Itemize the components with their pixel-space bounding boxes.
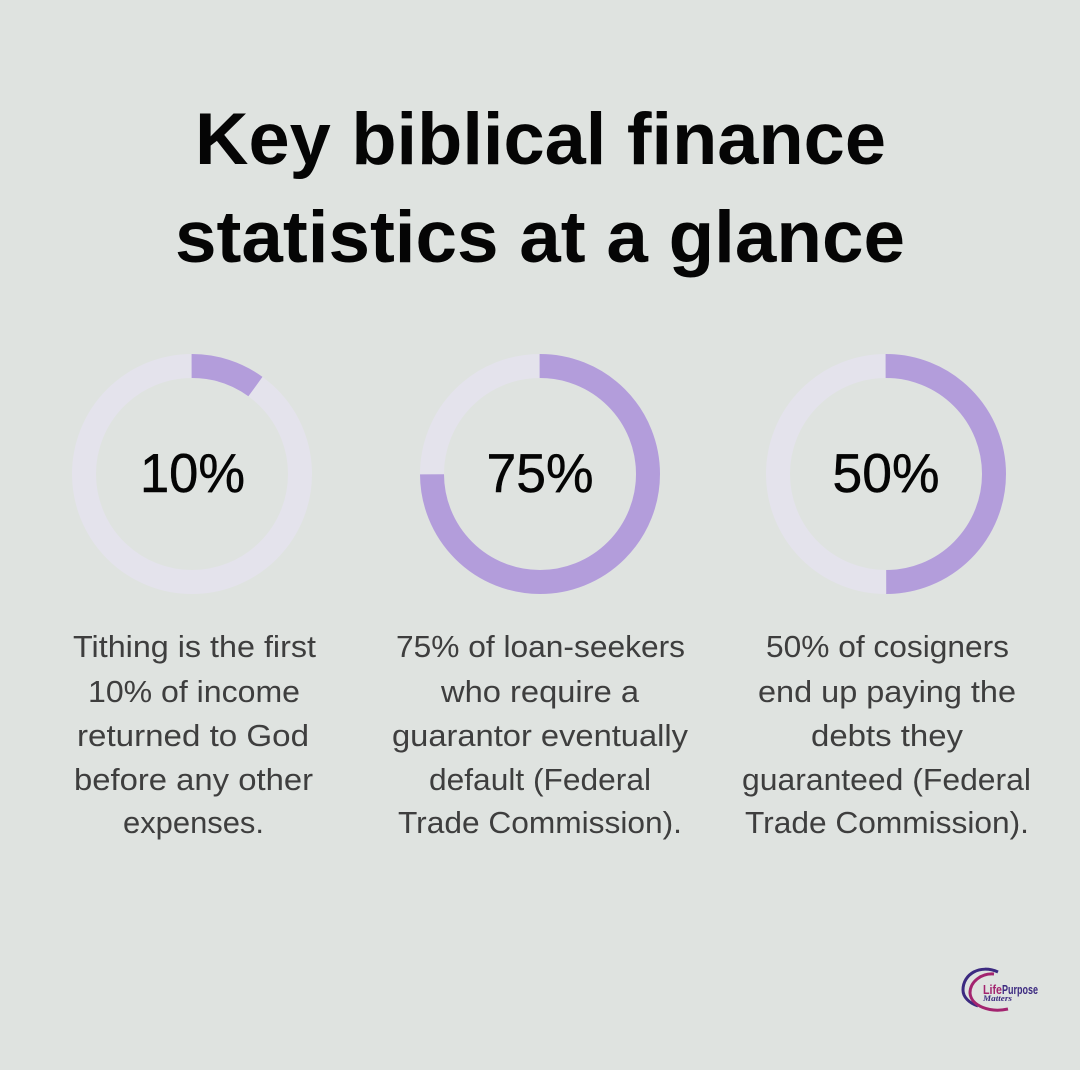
text: cosigners description: end up paying the — [758, 674, 1016, 709]
title: statistics at a glance — [175, 197, 905, 278]
text: tithing description: expenses. — [123, 805, 264, 840]
donut chart: 10% — [84, 366, 300, 582]
text: loan-seekers description — [392, 629, 689, 840]
title — [175, 99, 905, 278]
text: loan-seekers description: Trade Commission). — [398, 805, 682, 840]
logo: Life Purpose Matters: Matters — [982, 994, 1012, 1003]
logo: Life Purpose Matters — [963, 969, 1038, 1010]
donut chart: 75% — [432, 366, 648, 582]
donut chart: 75%: 75% — [486, 442, 594, 504]
text: cosigners description — [742, 629, 1031, 840]
text: loan-seekers description: guarantor eventually — [392, 718, 689, 753]
logo: Life Purpose Matters: Life — [983, 982, 1002, 997]
text: tithing description: returned to God — [77, 718, 309, 753]
text: tithing description: Tithing is the first — [73, 629, 316, 664]
text: loan-seekers description: 75% of loan-seekers — [396, 629, 685, 664]
title: Key biblical finance — [195, 99, 886, 180]
donut chart: 50%: 50% — [832, 442, 940, 504]
panel: 75% loan-seekers — [392, 366, 689, 840]
donut chart: 10%: 10% — [140, 442, 245, 504]
logo: Life Purpose Matters: Purpose — [1002, 982, 1038, 997]
text: loan-seekers description: default (Federal — [429, 762, 651, 797]
text: cosigners description: 50% of cosigners — [766, 629, 1009, 664]
text: cosigners description: Trade Commission). — [745, 805, 1029, 840]
text: tithing description: before any other — [74, 762, 313, 797]
panel: 10% tithing — [73, 366, 316, 840]
panel: 50% cosigners — [742, 366, 1031, 840]
donut chart: 50% — [778, 366, 994, 582]
text: loan-seekers description: who require a — [440, 674, 640, 709]
text: cosigners description: debts they — [811, 718, 964, 753]
text: tithing description: 10% of income — [88, 674, 300, 709]
text: tithing description — [73, 629, 316, 840]
text: cosigners description: guaranteed (Federal — [742, 762, 1031, 797]
